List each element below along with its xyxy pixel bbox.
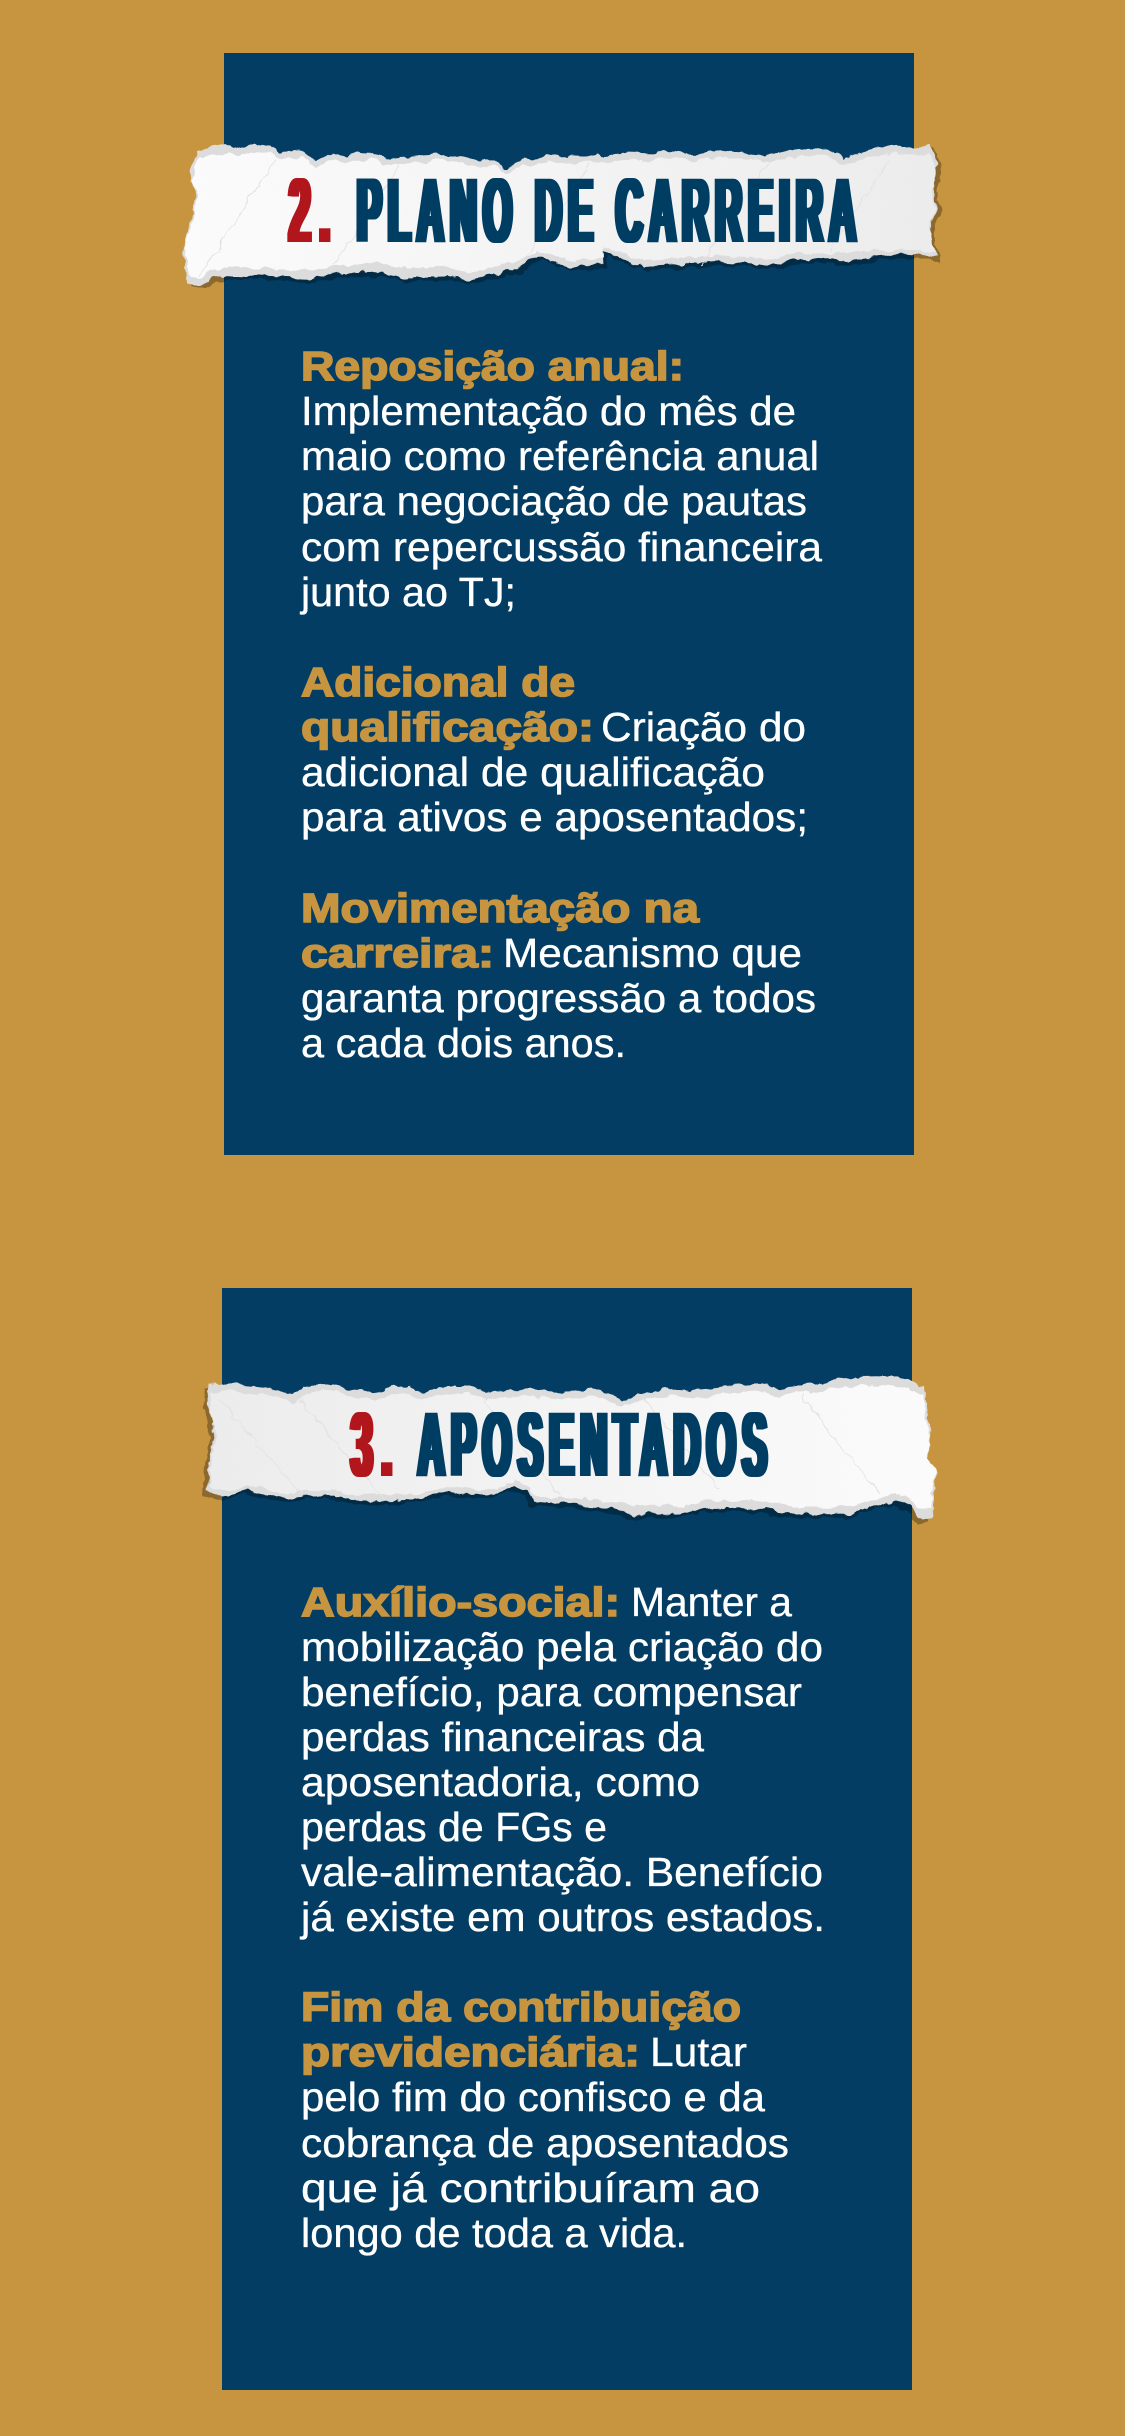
text block: auxílio-social: aposentadoria, como <box>301 1759 700 1805</box>
text block: auxílio-social: Auxílio-social: <box>301 1579 620 1625</box>
text block: fim da contribuição previdenciária: longo de toda a vida. <box>301 2210 687 2256</box>
text block: reposição anual <box>300 343 822 615</box>
text block: auxílio-social <box>300 1579 825 1940</box>
text block: auxílio-social: perdas de FGs e <box>301 1804 607 1850</box>
text block: fim da contribuição previdenciária: Fim da contribuição <box>301 1984 741 2030</box>
heading: 2. plano de carreira: 2. <box>289 159 330 262</box>
text block: reposição anual: com repercussão financeira <box>301 524 822 570</box>
text block: auxílio-social: Manter a <box>631 1579 792 1625</box>
heading: 3. aposentados: 3. <box>351 1393 392 1496</box>
text block: adicional de qualificação: Adicional de <box>301 659 575 705</box>
text block: adicional de qualificação: qualificação: <box>301 704 594 750</box>
text block: movimentação na carreira: a cada dois anos. <box>301 1020 626 1066</box>
text block: auxílio-social: benefício, para compensar <box>301 1669 802 1715</box>
text block: fim da contribuição previdenciária <box>301 1984 789 2256</box>
text block: reposição anual: Reposição anual: <box>301 343 684 389</box>
text block: reposição anual: junto ao TJ; <box>300 569 516 615</box>
heading: 3. aposentados: APOSENTADOS <box>418 1393 767 1496</box>
text block: reposição anual: Implementação do mês de <box>301 388 796 434</box>
text block: fim da contribuição previdenciária: Lutar <box>650 2029 747 2075</box>
text block: fim da contribuição previdenciária: previdenciária: <box>301 2029 640 2075</box>
text block: adicional de qualificação <box>301 659 808 840</box>
text block: reposição anual: maio como referência anual <box>301 433 819 479</box>
text block: reposição anual: para negociação de pautas <box>301 478 807 524</box>
panel: plano de carreira <box>183 53 942 1155</box>
torn paper banner: plano de carreira <box>183 144 942 291</box>
text block: movimentação na carreira: Movimentação na <box>301 885 700 931</box>
text block: movimentação na carreira: garanta progressão a todos <box>301 975 816 1021</box>
text block: auxílio-social: já existe em outros estados. <box>300 1894 825 1940</box>
text block: movimentação na carreira: carreira: <box>301 930 494 976</box>
text block: movimentação na carreira: Mecanismo que <box>503 930 802 976</box>
text block: adicional de qualificação: Criação do <box>601 704 806 750</box>
text block: movimentação na carreira <box>301 885 816 1066</box>
heading: 2. plano de carreira: PLANO DE CARREIRA <box>357 159 856 262</box>
text block: fim da contribuição previdenciária: que já contribuíram ao <box>301 2165 760 2211</box>
text block: adicional de qualificação: adicional de qualificação <box>301 749 765 795</box>
text block: fim da contribuição previdenciária: cobrança de aposentados <box>301 2120 789 2166</box>
text block: fim da contribuição previdenciária: pelo fim do confisco e da <box>301 2074 765 2120</box>
torn paper banner: aposentados <box>203 1376 936 1522</box>
panel: aposentados <box>203 1288 936 2390</box>
text block: auxílio-social: perdas financeiras da <box>301 1714 704 1760</box>
text block: auxílio-social: mobilização pela criação do <box>301 1624 823 1670</box>
text block: adicional de qualificação: para ativos e aposentados; <box>301 794 808 840</box>
text block: auxílio-social: vale-alimentação. Benefício <box>301 1849 823 1895</box>
